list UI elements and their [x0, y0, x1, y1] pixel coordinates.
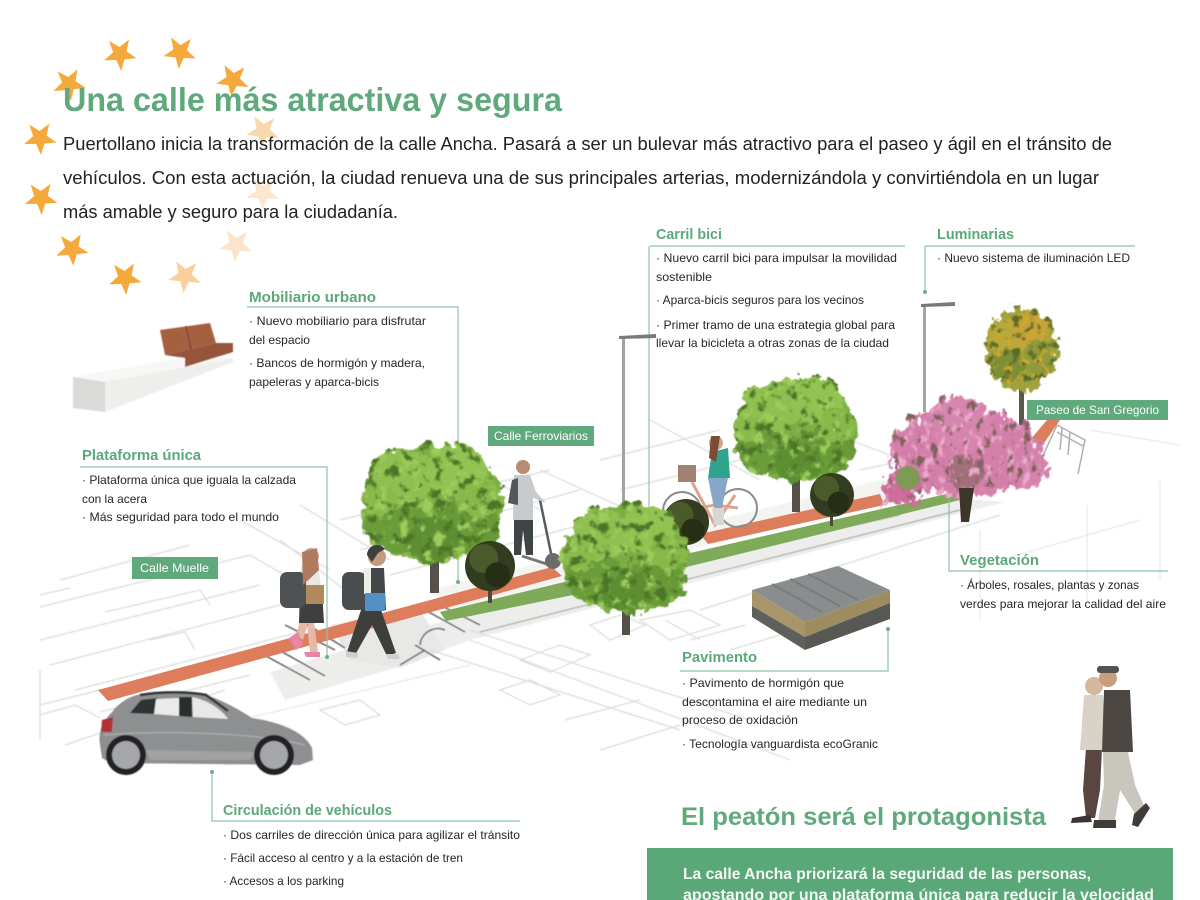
tree: large tree centre back — [733, 377, 857, 512]
label: Paseo de San Gregorio: Paseo de San Gregorio — [1036, 403, 1159, 417]
panel: Carril bici: · Aparca-bicis seguros para los vecinos — [656, 293, 864, 307]
panel: Circulación de vehículos: Circulación de vehículos — [223, 802, 392, 819]
topiary: round shrub far — [810, 473, 854, 526]
tree: large tree front — [561, 503, 689, 635]
bench and railing at Paseo de San Gregorio — [1040, 425, 1085, 474]
panel: Plataforma única: con la acera — [82, 492, 147, 506]
tree: large tree left — [359, 444, 502, 593]
panel: Pavimento: · Pavimento de hormigón que — [682, 676, 844, 690]
green strip — [440, 492, 960, 621]
panel: Pavimento — [682, 649, 878, 751]
panel: Carril bici: Carril bici — [656, 226, 722, 243]
intro text: más amable y seguro para la ciudadanía. — [63, 202, 398, 222]
bench illustration — [73, 323, 233, 412]
elderly couple walking — [1071, 666, 1150, 828]
panel: green pedestrian box — [647, 848, 1173, 900]
tree: autumn tree — [985, 307, 1057, 437]
topiary: round shrub near — [465, 541, 515, 603]
intro text — [63, 134, 1112, 222]
intro text: Puertollano inicia la transformación de la calle Ancha. Pasará a ser un bulevar más atractivo para el paseo y ágil en el tránsito de — [63, 134, 1112, 154]
pavement sample block — [752, 566, 890, 650]
heading: El peatón será el protagonista: El peatón será el protagonista — [681, 803, 1047, 831]
panel: Vegetación: verdes para mejorar la calidad del aire — [960, 597, 1166, 611]
street lamp left — [619, 334, 656, 503]
label: Paseo de San Gregorio — [1027, 400, 1168, 420]
schoolboy walking — [342, 545, 400, 659]
panel: Pavimento: descontamina el aire mediante un — [682, 695, 867, 709]
panel: Circulación de vehículos: · Dos carriles de dirección única para agilizar el tránsito — [223, 828, 520, 842]
cycle lane: orange strip — [98, 420, 1060, 701]
label: Calle Ferroviarios — [488, 426, 594, 446]
panel: Carril bici — [656, 226, 897, 350]
panel: Vegetación: Vegetación — [960, 552, 1039, 569]
panel: Vegetación: · Árboles, rosales, plantas y zonas — [960, 577, 1139, 592]
title: Una calle más atractiva y segura — [63, 81, 563, 118]
connector end dots — [210, 290, 927, 774]
panel: Mobiliario urbano: · Bancos de hormigón y madera, — [249, 356, 425, 370]
panel: Luminarias: · Nuevo sistema de iluminación LED — [937, 251, 1130, 265]
panel: Circulación de vehículos: · Accesos a los parking — [223, 874, 344, 888]
panel: Carril bici: sostenible — [656, 270, 712, 284]
schoolgirl walking — [280, 548, 324, 657]
panel: Mobiliario urbano — [249, 289, 426, 389]
car — [100, 692, 313, 775]
label: Calle Muelle: Calle Muelle — [140, 561, 209, 575]
panel: Plataforma única — [82, 447, 296, 524]
panel: Pavimento: · Tecnología vanguardista ecoGranic — [682, 737, 878, 751]
panel: Mobiliario urbano: papeleras y aparca-bicis — [249, 375, 379, 389]
label: Calle Muelle — [132, 557, 218, 579]
tree: pink flowering tree — [882, 397, 1048, 522]
panel: Plataforma única: · Plataforma única que iguala la calzada — [82, 473, 296, 487]
panel: Luminarias: Luminarias — [937, 226, 1014, 243]
panel: Pavimento: Pavimento — [682, 649, 757, 666]
panel: Pavimento: proceso de oxidación — [682, 713, 798, 727]
panel: Carril bici: llevar la bicicleta a otras zonas de la ciudad — [656, 336, 889, 350]
panel: Mobiliario urbano: Mobiliario urbano — [249, 289, 376, 306]
label: Calle Ferroviarios: Calle Ferroviarios — [494, 429, 588, 443]
panel: Plataforma única: Plataforma única — [82, 447, 202, 464]
panel: Circulación de vehículos — [223, 802, 520, 888]
street lamp right — [921, 302, 955, 412]
decoration: circle of stars — [23, 37, 280, 296]
panel: Plataforma única: · Más seguridad para todo el mundo — [82, 510, 279, 524]
panel: Mobiliario urbano: · Nuevo mobiliario para disfrutar — [249, 314, 426, 328]
topiary: round shrub middle — [663, 499, 709, 552]
street plan base drawing — [40, 420, 1180, 765]
intro text: vehículos. Con esta actuación, la ciudad renueva una de sus principales arterias, modernizándola y convirtiéndola en un lugar — [63, 168, 1099, 188]
panel: Luminarias — [937, 226, 1130, 265]
panel: Mobiliario urbano: del espacio — [249, 333, 310, 347]
panel: Carril bici: · Nuevo carril bici para impulsar la movilidad — [656, 251, 897, 265]
panel: Vegetación — [960, 552, 1166, 611]
panel: Carril bici: · Primer tramo de una estrategia global para — [656, 318, 895, 332]
callout connectors — [80, 246, 1168, 821]
panel: green pedestrian box: La calle Ancha priorizará la seguridad de las personas, — [683, 866, 1091, 883]
person on electric scooter — [508, 460, 561, 569]
panel: Circulación de vehículos: · Fácil acceso al centro y a la estación de tren — [223, 851, 463, 865]
person on bicycle — [663, 436, 757, 530]
